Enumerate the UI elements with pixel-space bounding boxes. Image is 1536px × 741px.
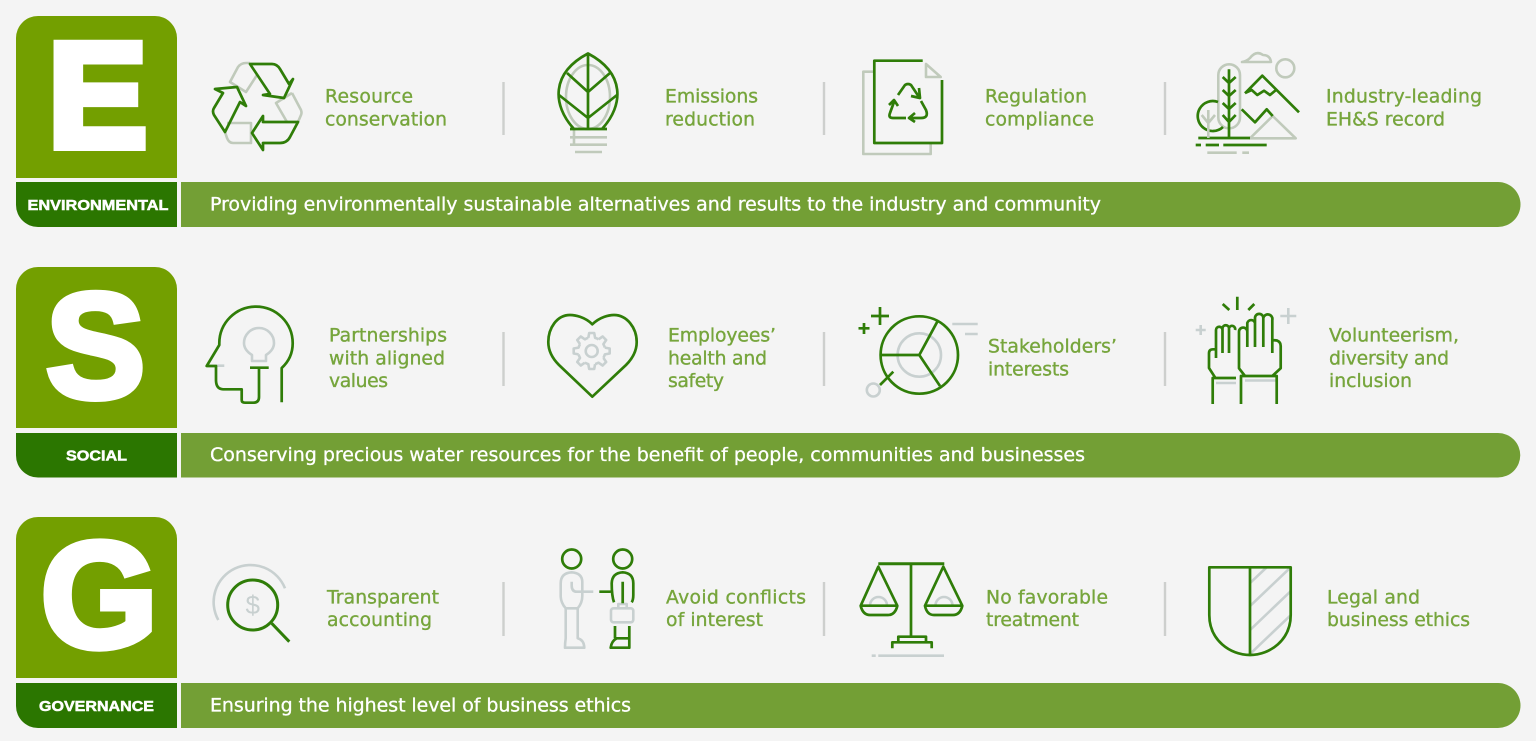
text: resource conservation — [325, 87, 447, 130]
icon: heart with gear — [548, 315, 637, 397]
text: employees health and safety: safety — [668, 371, 724, 392]
letter tile E — [16, 11, 177, 179]
text: emissions reduction — [665, 87, 758, 130]
text: transparent accounting — [326, 587, 439, 631]
icon: landscape — [1196, 53, 1299, 153]
text: legal and business ethics: Legal and — [1327, 587, 1420, 608]
banner: governance statement — [181, 683, 1521, 728]
text: no favorable treatment — [986, 587, 1108, 631]
banner: social statement: Conserving precious water resources for the benefit of people, communities and businesses — [210, 444, 1085, 466]
letter tile E: E — [48, 11, 148, 179]
icon: head with bulb — [207, 307, 293, 403]
label: social — [16, 433, 177, 478]
text: regulation compliance: compliance — [985, 109, 1094, 130]
text: regulation compliance: Regulation — [985, 87, 1087, 108]
label: governance: GOVERNANCE — [39, 699, 154, 715]
panel: environmental — [16, 11, 1521, 227]
label: governance — [16, 683, 177, 728]
text: resource conservation: conservation — [325, 109, 447, 130]
icon: shield — [1209, 567, 1292, 655]
banner: environmental statement: Providing environmentally sustainable alternatives and results to the industry and community — [210, 194, 1101, 216]
text: legal and business ethics — [1327, 587, 1470, 631]
icon: balance scales — [861, 564, 962, 656]
icon: leaf bulb — [559, 54, 617, 152]
text: volunteerism diversity inclusion: inclusion — [1329, 371, 1412, 392]
text: emissions reduction: Emissions — [665, 87, 758, 108]
text: partnerships with aligned values: with aligned — [329, 349, 445, 370]
text: partnerships with aligned values — [329, 326, 447, 392]
text: legal and business ethics: business ethics — [1327, 610, 1470, 631]
text: industry-leading record: Industry-leading — [1326, 87, 1482, 108]
icon: pie chart magnifier — [858, 307, 978, 396]
text: industry-leading record — [1326, 87, 1482, 130]
text: stakeholders interests: interests — [988, 360, 1069, 381]
banner: environmental statement — [181, 182, 1521, 227]
text: stakeholders interests — [988, 337, 1117, 381]
label: environmental — [16, 182, 177, 227]
icon: document recycle — [863, 61, 942, 154]
panel: governance — [16, 510, 1521, 728]
panel: social — [16, 262, 1520, 478]
text: no favorable treatment: treatment — [986, 610, 1079, 631]
text: volunteerism diversity inclusion: Volunteerism, — [1329, 326, 1459, 347]
text: resource conservation: Resource — [325, 87, 413, 108]
text: partnerships with aligned values: values — [329, 371, 388, 392]
icon: recycle — [213, 63, 302, 150]
letter tile S — [16, 262, 177, 430]
text: transparent accounting: accounting — [327, 610, 432, 631]
text: transparent accounting: Transparent — [326, 587, 439, 608]
text: no favorable treatment: No favorable — [986, 587, 1108, 608]
icon: magnifier with dollar — [214, 565, 289, 642]
icon: magnifier with dollar: $ — [245, 590, 260, 620]
text: avoid conflicts of interest — [666, 587, 806, 631]
text: employees health and safety: health and — [668, 349, 767, 370]
text: volunteerism diversity inclusion: diversity and — [1329, 349, 1449, 370]
text: partnerships with aligned values: Partnerships — [329, 326, 447, 347]
banner: governance statement: Ensuring the highest level of business ethics — [210, 694, 631, 716]
label: social: SOCIAL — [66, 448, 127, 464]
text: regulation compliance — [985, 87, 1094, 130]
text: volunteerism diversity inclusion — [1329, 326, 1459, 392]
text: emissions reduction: reduction — [665, 109, 755, 130]
icon: two people with briefcase — [561, 550, 633, 648]
banner: social statement — [181, 433, 1520, 478]
letter tile G: G — [40, 510, 158, 679]
icon: high five hands — [1196, 297, 1296, 404]
label: environmental: ENVIRONMENTAL — [28, 198, 169, 214]
text: employees health and safety: Employees’ — [668, 326, 776, 347]
letter tile S: S — [46, 262, 146, 430]
text: industry-leading record: EH&S record — [1326, 109, 1445, 130]
text: stakeholders interests: Stakeholders’ — [988, 337, 1117, 358]
text: employees health and safety — [668, 326, 776, 392]
text: avoid conflicts of interest: of interest — [666, 610, 763, 631]
text: avoid conflicts of interest: Avoid conflicts — [666, 587, 806, 608]
